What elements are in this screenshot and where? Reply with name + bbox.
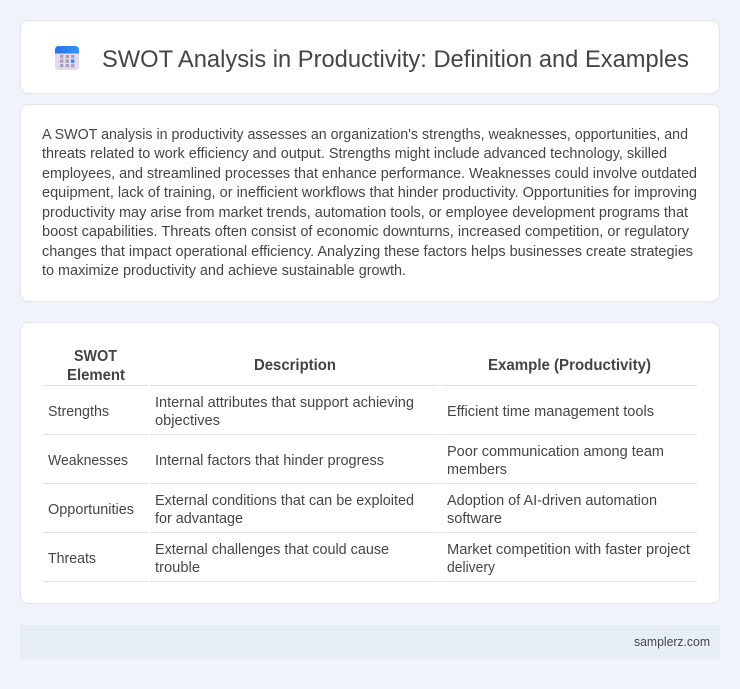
table row: opportunities — [48, 493, 657, 527]
table row: strengths: objectives — [155, 413, 220, 429]
table row: threats: External challenges that could cause — [155, 542, 389, 558]
table header — [67, 348, 651, 384]
table header: Description — [254, 357, 336, 374]
table row: weaknesses: Poor communication among team — [447, 444, 664, 460]
text block: summary: to maximize productivity and achieve sustainable growth. — [42, 263, 406, 279]
table row: threats — [48, 542, 690, 576]
table row: threats: Threats — [48, 551, 96, 567]
table header: SWOT — [74, 348, 117, 365]
text block: summary: productivity may arise from market trends, automation tools, or employee development programs that — [42, 205, 688, 221]
table header: Example (Productivity) — [488, 357, 651, 374]
table row: strengths: Strengths — [48, 404, 109, 420]
panel: SWOT table — [20, 322, 720, 604]
table row: threats: Market competition with faster project — [447, 542, 690, 558]
table row: weaknesses: members — [447, 462, 507, 478]
footer brand: samplerz.com — [634, 635, 710, 649]
table row: opportunities: Opportunities — [48, 502, 134, 518]
table row: opportunities: software — [447, 511, 502, 527]
table row: weaknesses: Weaknesses — [48, 453, 128, 469]
text block: summary: employees, and streamlined processes that enhance performance. Weaknesses could involve outdated — [42, 166, 697, 182]
text block: summary — [42, 127, 697, 279]
table row: opportunities: External conditions that can be exploited — [155, 493, 414, 509]
table row: threats: delivery — [447, 560, 496, 576]
text block: summary: equipment, lack of training, or inefficient workflows that hinder productivity. Opportunities for improving — [42, 185, 697, 201]
table row: strengths — [48, 395, 654, 429]
table row: strengths: Efficient time management tools — [447, 404, 654, 420]
text block: summary: boost capabilities. Threats often consist of economic downturns, increased competition, or regulatory — [42, 224, 690, 240]
table row: strengths: Internal attributes that support achieving — [155, 395, 414, 411]
text block: summary: threats related to work efficiency and output. Strengths might include advanced technology, skilled — [42, 146, 667, 162]
panel: intro paragraph — [20, 104, 720, 302]
text block: summary: A SWOT analysis in productivity assesses an organization's strengths, weaknesses, opportunities, and — [42, 127, 688, 143]
table header: Element — [67, 367, 125, 384]
text block: summary: changes that impact operational efficiency. Analyzing these factors helps businesses create strategies — [42, 244, 693, 260]
table row: opportunities: Adoption of AI-driven automation — [447, 493, 657, 509]
table row: weaknesses: Internal factors that hinder progress — [155, 453, 384, 469]
footer — [20, 625, 720, 659]
title: SWOT Analysis in Productivity: Definition and Examples — [102, 46, 689, 73]
icon: calendar — [55, 46, 79, 70]
table row: weaknesses — [48, 444, 664, 478]
panel: title card — [20, 20, 720, 94]
table row: opportunities: for advantage — [155, 511, 243, 527]
table row: threats: trouble — [155, 560, 200, 576]
